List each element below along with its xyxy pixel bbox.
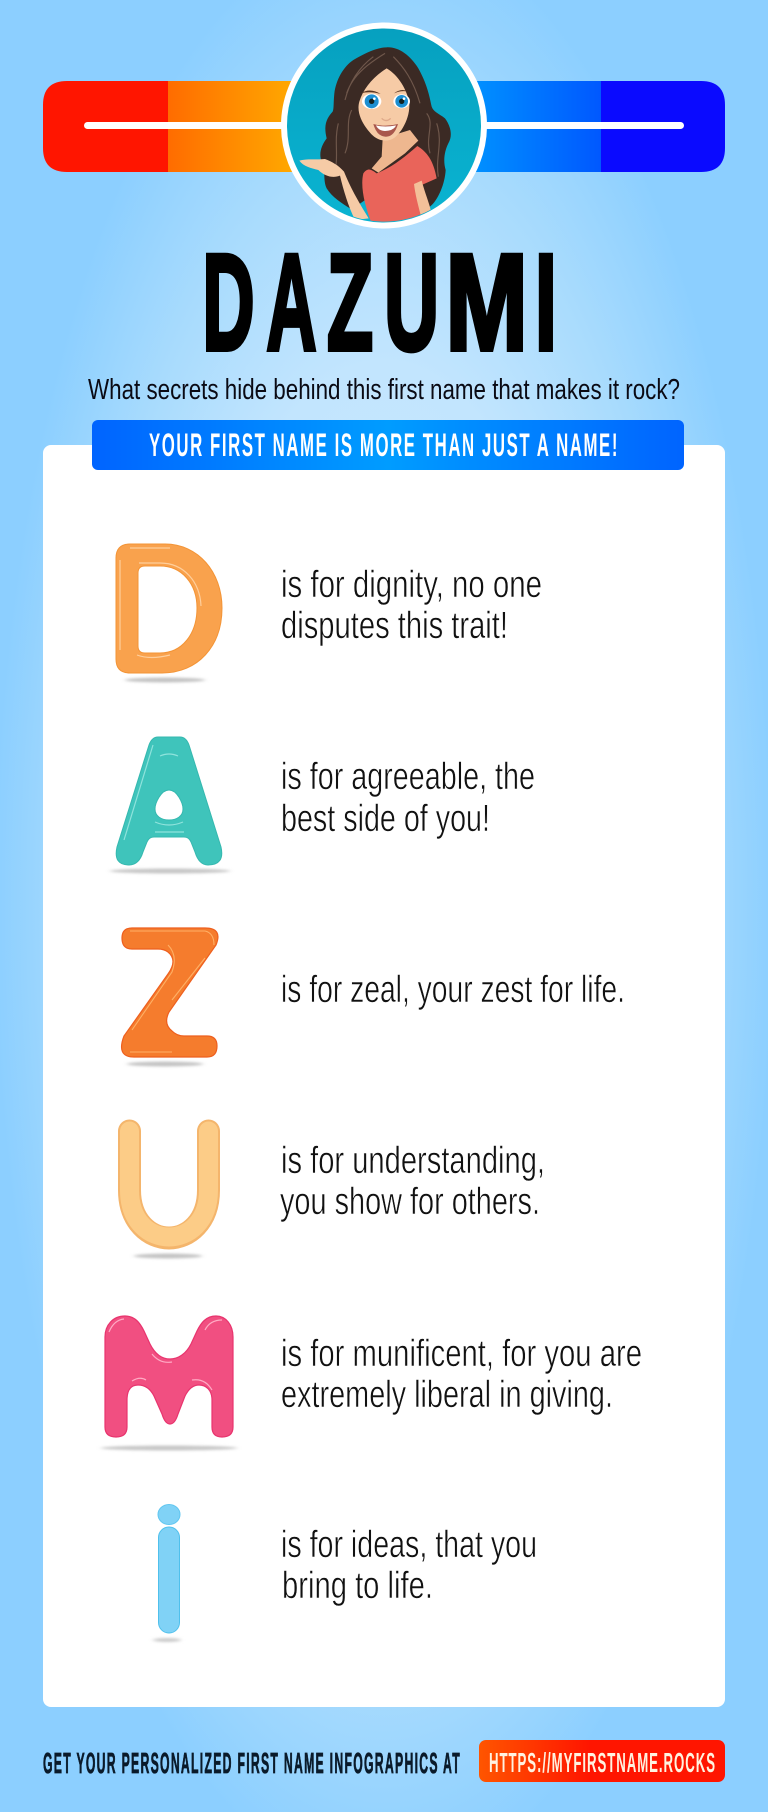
text: A: best side of you! xyxy=(281,798,490,840)
text: A xyxy=(281,756,535,840)
text: i: bring to life. xyxy=(282,1565,433,1607)
title: M xyxy=(446,226,528,380)
panel: letters xyxy=(43,445,725,1707)
letter M xyxy=(101,1316,237,1450)
text: D xyxy=(281,564,542,647)
avatar portrait xyxy=(284,26,484,226)
neck xyxy=(372,130,418,173)
title: D xyxy=(202,226,254,380)
left arm and hand xyxy=(299,159,369,220)
text: i xyxy=(281,1524,537,1607)
right arm xyxy=(414,180,430,214)
text: U: is for understanding, xyxy=(281,1140,545,1182)
text: A: is for agreeable, the xyxy=(281,756,535,798)
header ribbon xyxy=(43,81,725,172)
hair xyxy=(320,47,451,209)
letter i xyxy=(153,1504,181,1642)
letter D xyxy=(116,544,222,682)
text: M xyxy=(281,1333,642,1416)
text: U xyxy=(280,1140,545,1223)
title: U xyxy=(384,226,439,380)
text: D: is for dignity, no one xyxy=(281,564,542,606)
shirt xyxy=(362,146,437,223)
mouth xyxy=(373,124,398,137)
title: I xyxy=(535,226,557,380)
face xyxy=(359,68,409,141)
text: i: is for ideas, that you xyxy=(281,1524,537,1566)
letter U xyxy=(130,1131,208,1258)
eyebrows xyxy=(361,90,408,94)
text: Z: is for zeal, your zest for life. xyxy=(281,969,625,1011)
banner xyxy=(92,420,684,470)
nose xyxy=(382,118,391,120)
title: Z xyxy=(327,226,373,380)
title: A xyxy=(266,226,316,380)
text: M: extremely liberal in giving. xyxy=(281,1374,613,1416)
footer link button xyxy=(479,1740,725,1782)
text: U: you show for others. xyxy=(280,1181,540,1223)
eyes xyxy=(362,94,381,109)
letter Z xyxy=(122,928,218,1066)
text: D: disputes this trait! xyxy=(281,605,508,647)
text: M: is for munificent, for you are xyxy=(281,1333,642,1375)
letter A xyxy=(110,737,230,874)
